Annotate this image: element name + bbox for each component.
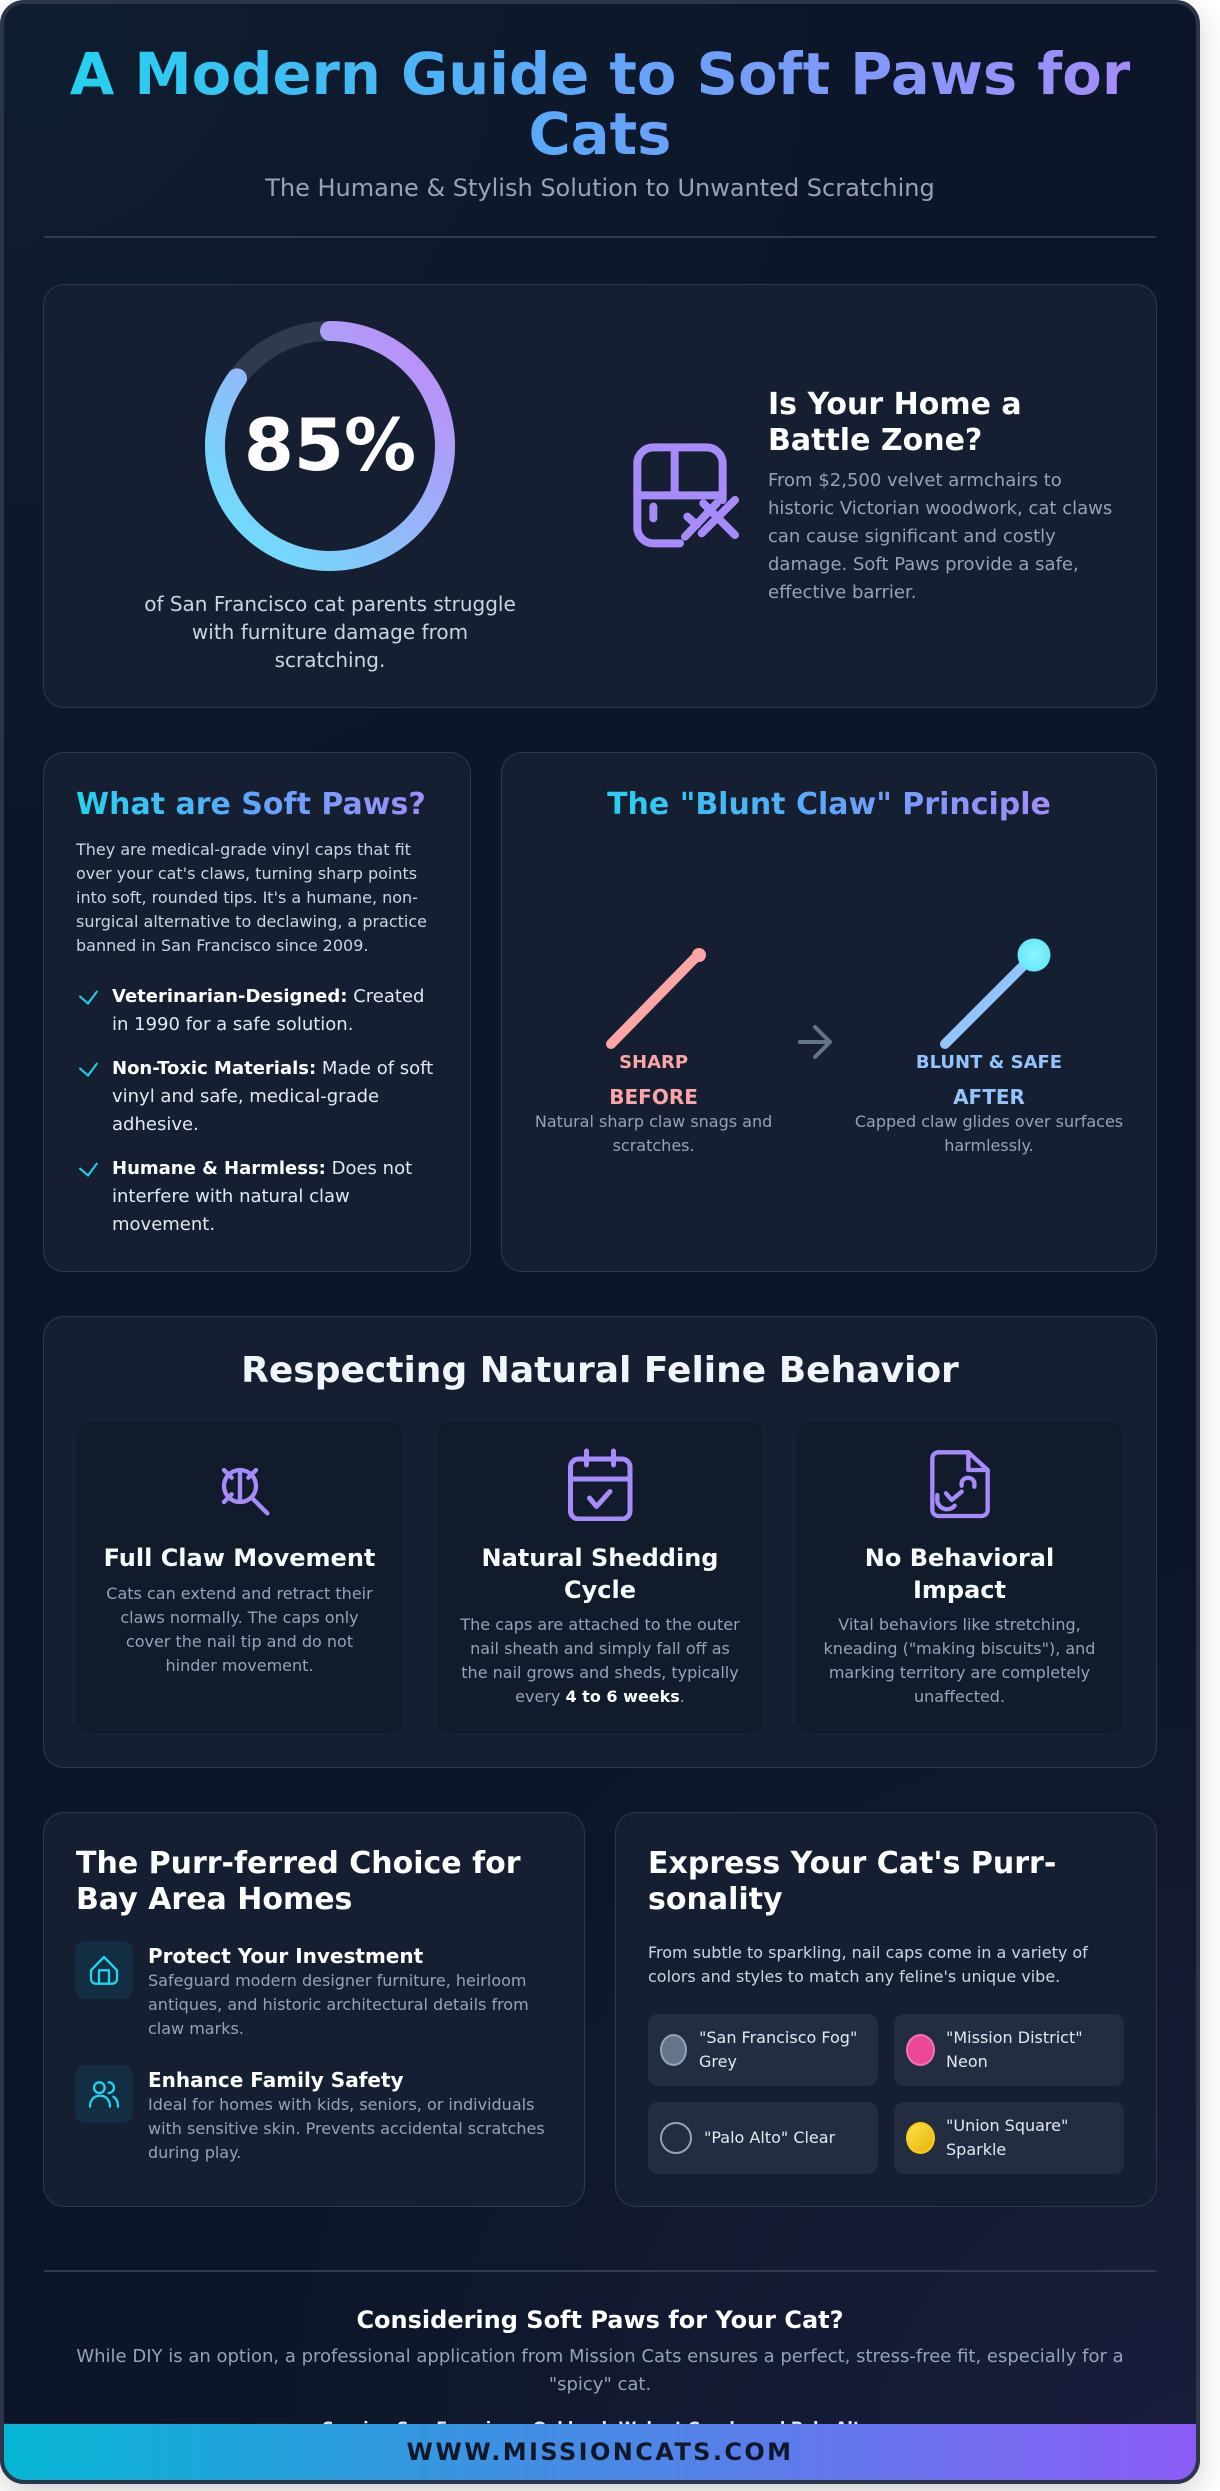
chip: union square sparkle bbox=[894, 2102, 1124, 2174]
battle zone text: historic Victorian woodwork, cat claws bbox=[768, 498, 1112, 519]
before description bbox=[535, 1112, 772, 1155]
heading bbox=[648, 1846, 1056, 1917]
after description: harmlessly. bbox=[944, 1136, 1034, 1155]
description: They are medical-grade vinyl caps that fit bbox=[76, 840, 411, 859]
battle zone text: From $2,500 velvet armchairs to bbox=[768, 470, 1062, 491]
card title bbox=[482, 1544, 718, 1604]
chip label: "Mission District" bbox=[946, 2028, 1083, 2047]
benefit text bbox=[148, 1971, 529, 2038]
panel: purr-ferred choice bbox=[44, 1813, 584, 2206]
card text bbox=[824, 1615, 1095, 1706]
list item: veterinarian-designed bbox=[78, 986, 424, 1035]
description: banned in San Francisco since 2009. bbox=[76, 936, 368, 955]
description: colors and styles to match any feline's unique vibe. bbox=[648, 1967, 1060, 1986]
description: surgical alternative to declawing, a practice bbox=[76, 912, 427, 931]
card: no behavioral impact bbox=[795, 1421, 1124, 1734]
card title: Natural Shedding bbox=[482, 1544, 718, 1572]
card text: cover the nail tip and do not bbox=[126, 1632, 353, 1651]
before description: scratches. bbox=[613, 1136, 695, 1155]
card text: The caps are attached to the outer bbox=[460, 1615, 740, 1634]
card text bbox=[460, 1615, 740, 1706]
description bbox=[76, 840, 427, 955]
list item: humane and harmless: movement. bbox=[112, 1214, 215, 1235]
card text: the nail grows and sheds, typically bbox=[461, 1663, 739, 1682]
card title: No Behavioral bbox=[865, 1544, 1054, 1572]
chip label bbox=[946, 2028, 1083, 2071]
arrow bbox=[798, 1024, 832, 1059]
chip label: "Palo Alto" Clear bbox=[704, 2128, 835, 2147]
title: A Modern Guide to Soft Paws for bbox=[70, 41, 1130, 108]
card text: claws normally. The caps only bbox=[120, 1608, 359, 1627]
footer bar bbox=[4, 2424, 1196, 2480]
benefit text: Ideal for homes with kids, seniors, or individuals bbox=[148, 2095, 534, 2114]
heading: battle zone: Battle Zone? bbox=[768, 423, 982, 458]
benefit title: protect your investment: Protect Your Investment bbox=[148, 1944, 423, 1968]
heading: battle zone: Is Your Home a bbox=[768, 387, 1022, 422]
card title: Impact bbox=[913, 1576, 1006, 1604]
heading: battle zone bbox=[768, 387, 1022, 458]
heading: The Purr-ferred Choice for bbox=[76, 1846, 521, 1881]
diagram: capped claw: BLUNT & SAFE bbox=[916, 1052, 1062, 1073]
call to action text: "spicy" cat. bbox=[549, 2374, 651, 2395]
panel: blunt claw principle bbox=[502, 753, 1156, 1271]
heading bbox=[76, 1846, 521, 1917]
list item: veterinarian-designed: Veterinarian-Designed: Created bbox=[112, 986, 424, 1007]
battle zone text: effective barrier. bbox=[768, 582, 916, 603]
chip: palo alto clear bbox=[648, 2102, 878, 2174]
panel: what are soft paws bbox=[44, 753, 470, 1271]
chip: mission district neon bbox=[894, 2014, 1124, 2086]
card: natural shedding cycle bbox=[436, 1421, 764, 1734]
chip label: Sparkle bbox=[946, 2140, 1006, 2159]
icon: home bbox=[75, 1941, 133, 1999]
card text: Cats can extend and retract their bbox=[106, 1584, 373, 1603]
title: Cats bbox=[529, 101, 671, 168]
list item: non-toxic materials: adhesive. bbox=[112, 1114, 199, 1135]
swatch: clear bbox=[660, 2122, 692, 2154]
heading: The "Blunt Claw" Principle bbox=[607, 787, 1051, 822]
benefit text: during play. bbox=[148, 2143, 241, 2162]
benefit text bbox=[148, 2095, 545, 2162]
benefit text: Safeguard modern designer furniture, heirloom bbox=[148, 1971, 526, 1990]
before label: BEFORE bbox=[609, 1085, 698, 1109]
card text: kneading ("making biscuits"), and bbox=[824, 1639, 1095, 1658]
statistic value: 85% bbox=[244, 403, 416, 487]
battle zone text: damage. Soft Paws provide a safe, bbox=[768, 554, 1079, 575]
heading: Express Your Cat's Purr- bbox=[648, 1846, 1056, 1881]
battle zone text: can cause significant and costly bbox=[768, 526, 1056, 547]
heading: Bay Area Homes bbox=[76, 1882, 352, 1917]
heading: sonality bbox=[648, 1882, 783, 1917]
swatch: gold bbox=[906, 2122, 935, 2154]
benefit title: enhance family safety: Enhance Family Safety bbox=[148, 2068, 404, 2092]
battle zone text bbox=[768, 470, 1112, 603]
description bbox=[648, 1943, 1088, 1986]
icon: scratched furniture bbox=[633, 443, 739, 548]
card title: Cycle bbox=[564, 1576, 636, 1604]
title bbox=[44, 45, 1156, 165]
card title bbox=[865, 1544, 1054, 1604]
header divider bbox=[44, 236, 1156, 238]
call to action text bbox=[76, 2346, 1124, 2395]
list item: humane and harmless: interfere with natural claw bbox=[112, 1186, 350, 1207]
after description bbox=[855, 1112, 1123, 1155]
swatch: pink bbox=[906, 2034, 935, 2066]
icon: claw document bbox=[930, 1450, 990, 1518]
description: over your cat's claws, turning sharp points bbox=[76, 864, 417, 883]
call to action text: While DIY is an option, a professional application from Mission Cats ensures a perfect, stress-free fit, especially for a bbox=[76, 2346, 1124, 2367]
card title: Full Claw Movement bbox=[104, 1544, 375, 1572]
benefit text: with sensitive skin. Prevents accidental scratches bbox=[148, 2119, 545, 2138]
footer bar: WWW.MISSIONCATS.COM bbox=[407, 2438, 793, 2466]
statistic caption: of San Francisco cat parents struggle bbox=[144, 592, 516, 616]
chip label bbox=[946, 2116, 1068, 2159]
list item: veterinarian-designed: in 1990 for a safe solution. bbox=[112, 1014, 353, 1035]
diagram: sharp claw bbox=[606, 948, 706, 1073]
statistic caption: with furniture damage from bbox=[192, 620, 468, 644]
icon: calendar check bbox=[568, 1448, 632, 1521]
card text: nail sheath and simply fall off as bbox=[470, 1639, 730, 1658]
statistic caption bbox=[144, 592, 516, 672]
subtitle: The Humane & Stylish Solution to Unwanted Scratching bbox=[265, 174, 935, 202]
after description: Capped claw glides over surfaces bbox=[855, 1112, 1123, 1131]
heading: What are Soft Paws? bbox=[76, 787, 426, 822]
icon: claw magnifier bbox=[222, 1468, 270, 1516]
panel: 85 percent statistic and battle zone bbox=[44, 285, 1156, 707]
before description: Natural sharp claw snags and bbox=[535, 1112, 772, 1131]
chip label: Neon bbox=[946, 2052, 988, 2071]
heading: Respecting Natural Feline Behavior bbox=[241, 1350, 959, 1391]
call to action heading: Considering Soft Paws for Your Cat? bbox=[356, 2306, 844, 2334]
chip label: "Union Square" bbox=[946, 2116, 1068, 2135]
panel: express your cat's purr-sonality bbox=[616, 1813, 1156, 2206]
chip label: "San Francisco Fog" bbox=[699, 2028, 857, 2047]
chip label bbox=[699, 2028, 857, 2071]
after label: AFTER bbox=[953, 1085, 1025, 1109]
list item: humane and harmless bbox=[78, 1158, 412, 1235]
description: From subtle to sparkling, nail caps come in a variety of bbox=[648, 1943, 1088, 1962]
donut chart: 85% bbox=[204, 321, 455, 571]
card text: unaffected. bbox=[914, 1687, 1005, 1706]
chip: san francisco fog grey bbox=[648, 2014, 878, 2086]
benefit text: claw marks. bbox=[148, 2019, 244, 2038]
list item: non-toxic materials: Non-Toxic Materials: Made of soft bbox=[112, 1058, 433, 1079]
panel: respecting natural feline behavior bbox=[44, 1317, 1156, 1767]
diagram: capped claw bbox=[916, 938, 1062, 1073]
icon: family bbox=[75, 2065, 133, 2123]
list item: humane and harmless: Humane & Harmless: Does not bbox=[112, 1158, 412, 1179]
card text: marking territory are completely bbox=[829, 1663, 1090, 1682]
card text: every 4 to 6 weeks. bbox=[515, 1687, 685, 1706]
diagram: sharp claw: SHARP bbox=[619, 1052, 688, 1073]
list item: non-toxic materials: vinyl and safe, medical-grade bbox=[112, 1086, 379, 1107]
description: into soft, rounded tips. It's a humane, non- bbox=[76, 888, 418, 907]
benefit text: antiques, and historic architectural details from bbox=[148, 1995, 529, 2014]
service area text: Serving San Francisco, Oakland, Walnut Creek, and Palo Alto. bbox=[322, 2418, 878, 2437]
card text bbox=[106, 1584, 373, 1675]
chip label: Grey bbox=[699, 2052, 737, 2071]
list item: non-toxic materials bbox=[78, 1058, 433, 1135]
card: full claw movement bbox=[75, 1421, 404, 1734]
card text: hinder movement. bbox=[165, 1656, 314, 1675]
swatch: grey bbox=[660, 2034, 687, 2066]
footer divider bbox=[44, 2270, 1156, 2272]
statistic caption: scratching. bbox=[275, 648, 385, 672]
card text: Vital behaviors like stretching, bbox=[838, 1615, 1081, 1634]
